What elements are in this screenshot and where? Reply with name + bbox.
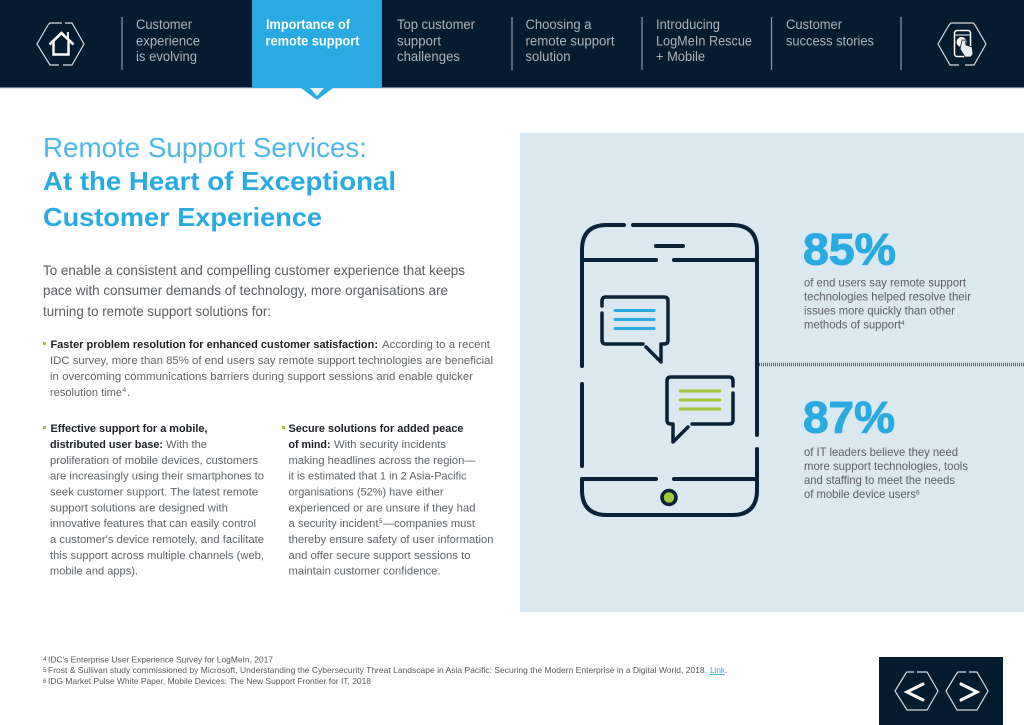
bullet: effective support for a mobile user base: support solutions are designed with	[50, 502, 228, 514]
title: Customer Experience	[43, 202, 322, 232]
bullet: secure solutions: —companies must	[383, 518, 476, 530]
bullet: secure solutions	[282, 423, 494, 578]
nav item: customer success stories	[786, 17, 874, 48]
stat: 85%: methods of support	[804, 318, 902, 332]
stat: 87%: 6	[916, 490, 920, 496]
bullet: secure solutions: a security incident	[288, 518, 379, 530]
bullet: faster problem resolution: According to a recent	[382, 339, 491, 351]
nav item: top customer support challenges	[397, 17, 475, 64]
stat: 85%: issues more quickly than other	[804, 304, 955, 318]
bullet: secure solutions: organisations (52%) have either	[288, 486, 444, 498]
footnotes	[43, 654, 727, 686]
nav item: importance of remote support (active): Importance of	[266, 17, 350, 32]
bullet: effective support for a mobile user base: mobile and apps).	[50, 566, 138, 578]
bullet: effective support for a mobile user base: With the	[166, 439, 207, 451]
bullet: faster problem resolution: Faster problem resolution for enhanced customer satisfaction:	[50, 339, 378, 351]
stat: 85%: 85%	[803, 226, 896, 274]
title: Remote Support Services:	[43, 132, 367, 163]
bullet: secure solutions: and offer secure support sessions to	[288, 550, 470, 562]
bullet: secure solutions: it is estimated that 1 in 2 Asia-Pacific	[288, 471, 467, 483]
nav item: introducing LogMeIn Rescue + Mobile: LogMeIn Rescue	[656, 34, 752, 48]
stat: 87%: of IT leaders believe they need	[804, 446, 958, 459]
bullet: effective support for a mobile user base: proliferation of mobile devices, customers	[50, 455, 258, 467]
stat: 87%	[803, 394, 968, 501]
nav item: introducing LogMeIn Rescue + Mobile: + Mobile	[656, 49, 705, 64]
nav item: customer experience: experience	[136, 34, 200, 48]
bullet: faster problem resolution: resolution time	[50, 387, 122, 399]
nav item: choosing a remote support solution: remote support	[526, 34, 615, 48]
title	[43, 132, 396, 232]
bullet: secure solutions: of mind:	[288, 439, 330, 451]
nav item: choosing a remote support solution: solution	[526, 49, 570, 64]
nav item: introducing LogMeIn Rescue + Mobile	[656, 17, 752, 64]
stat: 85%	[803, 226, 971, 332]
nav item: customer experience: is evolving	[136, 49, 197, 64]
nav item: customer success stories: success stories	[786, 34, 874, 48]
nav item: top customer support challenges: support	[397, 34, 441, 48]
stat: 85%: 4	[901, 320, 905, 327]
bullet: faster problem resolution: in overcoming communications barriers during support sessions and enable quicker	[50, 371, 473, 383]
bullet: effective support for a mobile user base: Effective support for a mobile,	[50, 423, 208, 435]
footnotes: 6	[43, 678, 47, 685]
bullet: effective support for a mobile user base: seek customer support. The latest remote	[50, 486, 258, 498]
bullet: faster problem resolution: .	[127, 387, 130, 399]
nav item: customer experience: Customer	[136, 17, 192, 32]
bullet: faster problem resolution: IDC survey, more than 85% of end users say remote support technologies are beneficial	[50, 355, 493, 367]
panel: statistics	[520, 133, 1024, 612]
stat: 87%: more support technologies, tools	[804, 460, 968, 473]
bullet: effective support for a mobile user base	[43, 423, 264, 578]
bullet: effective support for a mobile user base: distributed user base:	[50, 439, 163, 451]
title: At the Heart of Exceptional	[43, 166, 396, 196]
nav item: top customer support challenges: Top customer	[397, 17, 475, 32]
footnotes: 4	[43, 656, 47, 663]
footnotes: 5	[43, 667, 47, 674]
bullet: effective support for a mobile user base: a customer's device remotely, and facilitate	[50, 534, 264, 546]
nav item: importance of remote support (active): remote support	[266, 34, 360, 48]
top navigation bar	[0, 0, 1024, 100]
footnotes: Link	[710, 665, 726, 675]
nav item: introducing LogMeIn Rescue + Mobile: Introducing	[656, 17, 720, 32]
bullet: secure solutions: maintain customer confidence.	[288, 566, 440, 578]
nav item: top customer support challenges: challenges	[397, 49, 460, 64]
bullet: effective support for a mobile user base: this support across multiple channels (web,	[50, 550, 264, 562]
nav item: customer success stories: Customer	[786, 17, 842, 32]
bullet: faster problem resolution: 4	[122, 387, 126, 394]
bullet: effective support for a mobile user base: are increasingly using their smartphones to	[50, 471, 264, 483]
intro paragraph	[43, 262, 465, 319]
footnotes: Frost & Sullivan study commissioned by Microsoft, Understanding the Cybersecurity Threat Landscape in Asia Pacific: Securing the Modern Enterprise in a Digital World, 2018.	[48, 665, 707, 675]
intro paragraph: To enable a consistent and compelling customer experience that keeps	[43, 262, 465, 278]
nav item: importance of remote support (active)	[252, 0, 382, 100]
footnotes: IDG Market Pulse White Paper, Mobile Devices: The New Support Frontier for IT, 2018	[48, 676, 371, 686]
icon: mobile touch hexagon	[938, 23, 986, 65]
icon: next arrow	[946, 672, 988, 710]
divider: dotted line	[759, 363, 1024, 366]
bullet: secure solutions: With security incidents	[334, 439, 446, 451]
bullet: secure solutions: thereby ensure safety of user information	[288, 534, 494, 546]
stat: 85%: technologies helped resolve their	[804, 290, 971, 304]
bullet: secure solutions: making headlines across the region—	[288, 455, 476, 467]
footnotes: .	[725, 665, 727, 675]
stat: 85%: of end users say remote support	[804, 276, 967, 290]
stat: 87%: and staffing to meet the needs	[804, 474, 955, 487]
bullet: secure solutions: 5	[379, 518, 383, 525]
intro paragraph: turning to remote support solutions for:	[43, 303, 271, 319]
nav item: choosing a remote support solution	[526, 17, 615, 64]
icon: smartphone with chat bubbles	[582, 225, 757, 515]
intro paragraph: pace with consumer demands of technology, more organisations are	[43, 282, 448, 298]
stat: 87%: of mobile device users	[804, 488, 916, 501]
nav item: choosing a remote support solution: Choosing a	[526, 17, 592, 32]
footnotes: IDC's Enterprise User Experience Survey for LogMeIn, 2017	[48, 654, 273, 664]
bullet: effective support for a mobile user base: innovative features that can easily control	[50, 518, 256, 530]
page navigation box	[879, 657, 1003, 725]
bullet: faster problem resolution	[43, 339, 493, 399]
stat: 87%: 87%	[803, 394, 895, 442]
icon: home hexagon	[37, 23, 84, 65]
bullet: secure solutions: Secure solutions for added peace	[288, 423, 464, 435]
icon: previous arrow	[895, 672, 938, 710]
nav item: customer experience	[136, 17, 200, 64]
bullet: secure solutions: experienced or are unsure if they had	[288, 502, 476, 514]
